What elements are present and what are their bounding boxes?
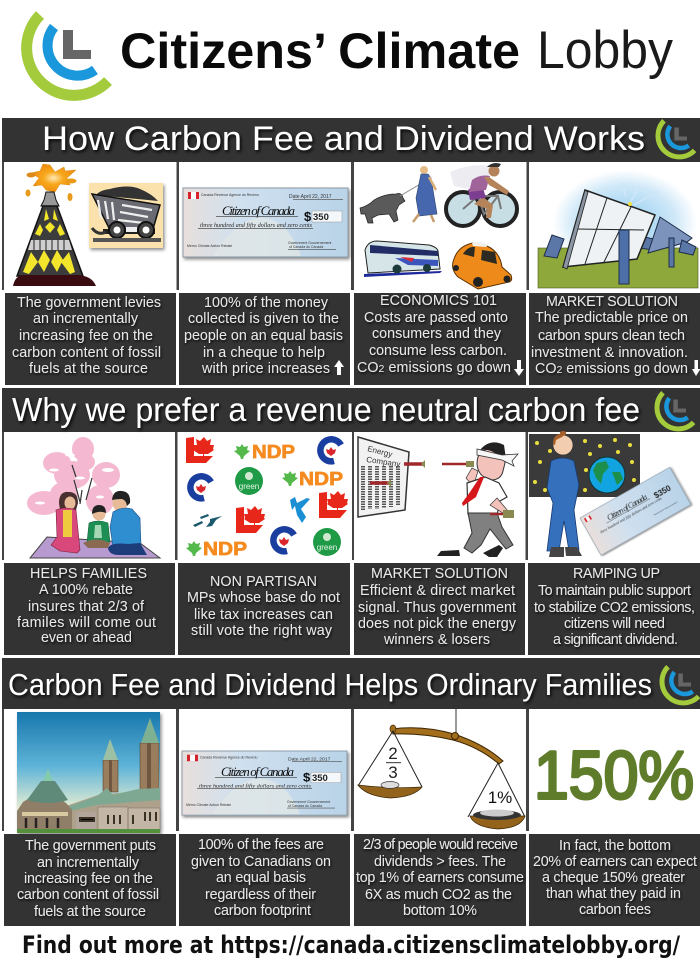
panel: non partisan: MPs whose base do not bbox=[187, 590, 340, 606]
panel: market solution bbox=[529, 293, 700, 385]
illustration: cheque: of Canada du Canada bbox=[289, 245, 323, 249]
illustration: cheque: Canada Revenue Agence du Revenu bbox=[200, 756, 258, 759]
icon: small logo bbox=[657, 393, 694, 429]
panel: bottom 20 percent: a cheque 150% greater bbox=[542, 870, 685, 886]
panel: non partisan bbox=[178, 563, 350, 655]
panel: economics 101: consumers and they bbox=[372, 326, 502, 342]
panel: helps families: HELPS FAMILIES bbox=[30, 566, 147, 582]
panel: non partisan: still vote the right way bbox=[191, 623, 333, 639]
heading band: Carbon Fee and Dividend Helps Ordinary Families bbox=[2, 658, 700, 709]
illustration: cheque: Date April 22, 2017 bbox=[288, 756, 331, 762]
panel: dividends greater than fees: dividends > fees. The bbox=[374, 854, 506, 870]
icon: tilted cheque: Government Gouvernement bbox=[653, 501, 678, 517]
panel: money returned: 100% of the money bbox=[204, 295, 329, 311]
icon: oil derrick bbox=[13, 164, 96, 286]
icon: back panels bbox=[544, 217, 696, 267]
logo: NDP bbox=[234, 442, 295, 462]
icon: logo mark bbox=[27, 15, 108, 95]
panel: market solution: investment & innovation. bbox=[531, 345, 688, 361]
panel: helps families: insures that 2/3 of bbox=[28, 599, 144, 615]
icon: tilted cheque bbox=[580, 467, 691, 555]
panel: economics 101: consume less carbon. bbox=[369, 343, 507, 359]
arrow: down bbox=[692, 360, 700, 376]
icon: right pan: 1% bbox=[488, 788, 512, 807]
logo: Citizens' Climate Lobby bbox=[27, 15, 673, 95]
illustration: political party logos bbox=[186, 437, 348, 559]
panel: market solution: winners & losers bbox=[383, 632, 490, 648]
icon: small logo bbox=[658, 121, 695, 157]
icon: front solar panel bbox=[563, 182, 658, 284]
panel: ramping up: RAMPING UP bbox=[573, 566, 660, 582]
icon: orange car bbox=[453, 242, 512, 289]
panel: government puts: fuels at the source bbox=[34, 904, 146, 920]
illustration: cheque: Government Gouvernement bbox=[287, 800, 330, 804]
icon: man with darts bbox=[437, 442, 518, 557]
panel: government levies bbox=[5, 293, 176, 385]
logo: NDP bbox=[282, 469, 343, 489]
panel: market solution: does not pick the energy bbox=[358, 616, 517, 632]
icon: maple leaf bbox=[244, 506, 265, 525]
panel: bottom 20 percent: 20% of earners can expect bbox=[533, 854, 697, 870]
icon: small logo bbox=[662, 667, 699, 703]
arrow: down bbox=[514, 360, 524, 376]
panel: bottom 20 percent bbox=[529, 834, 700, 926]
logo wordmark bold: Citizens’ Climate bbox=[120, 23, 520, 79]
heading text: Why we prefer a revenue neutral carbon fee bbox=[12, 391, 640, 428]
icon: Forces et Democratie logo bbox=[193, 514, 222, 527]
illustration: balance scale bbox=[358, 709, 525, 829]
logo: NDP: NDP bbox=[203, 539, 247, 559]
icon: globe bbox=[589, 457, 625, 493]
panel: bottom 20 percent: In fact, the bottom bbox=[559, 838, 671, 854]
logo: NDP bbox=[186, 539, 247, 559]
panel: government puts: The government puts bbox=[25, 838, 156, 854]
panel: government levies: carbon content of fossil bbox=[12, 345, 161, 361]
logo: Green party bbox=[313, 528, 341, 556]
panel: ramping up: to stabilize CO2 emissions, bbox=[534, 600, 695, 616]
icon: starry panel bbox=[529, 434, 640, 497]
panel: fees given: 100% of the fees are bbox=[198, 837, 324, 853]
icon: picnic rug bbox=[30, 537, 160, 558]
panel: market solution: MARKET SOLUTION bbox=[546, 294, 678, 310]
illustration: family under a blossom tree bbox=[27, 437, 160, 558]
panel: economics 101: Costs are passed onto bbox=[364, 310, 508, 326]
icon: mother bbox=[51, 492, 80, 553]
logo: Green party: green bbox=[239, 482, 259, 491]
panel: helps families: A 100% rebate bbox=[39, 582, 133, 598]
icon: energy company board bbox=[358, 437, 425, 517]
panel: non partisan: like tax increases can bbox=[194, 607, 333, 623]
icon: maple leaf bbox=[193, 437, 214, 456]
panel: economics 101 bbox=[354, 293, 526, 385]
panel: non partisan: NON PARTISAN bbox=[210, 574, 317, 590]
illustration: cheque: Government Gouvernement bbox=[288, 241, 331, 245]
panel: dividends greater than fees: top 1% of earners consume bbox=[356, 870, 524, 886]
icon: Liberal logo bbox=[319, 492, 347, 518]
illustration: woman, globe and cheque bbox=[529, 431, 691, 557]
panel: money returned: people on an equal basis bbox=[184, 328, 343, 344]
panel: money returned: collected is given to the bbox=[188, 311, 339, 327]
icon: right pan bbox=[468, 763, 525, 829]
illustration: cheque: Memo Climate Action Rebate bbox=[186, 803, 231, 807]
icon: towers bbox=[103, 718, 159, 808]
icon: cyclist bbox=[446, 163, 517, 226]
icon: Conservative logo bbox=[190, 476, 211, 498]
illustration: walking, cycling, bus and small car bbox=[360, 163, 517, 289]
panel: dividends greater than fees: 6X as much CO2 as the bbox=[365, 887, 512, 903]
icon: energy company board: Company bbox=[366, 455, 401, 469]
icon: left pan: 2 bbox=[388, 744, 398, 763]
heading text: How Carbon Fee and Dividend Works bbox=[42, 120, 645, 158]
panel: government levies: increasing fee on the bbox=[19, 328, 153, 344]
panel: fees given: regardless of their bbox=[205, 887, 316, 903]
illustration: cheque bbox=[182, 751, 347, 815]
illustration: blindfolded man throwing darts bbox=[358, 437, 518, 557]
panel: market solution: CO2 emissions go down bbox=[535, 361, 688, 377]
panel: helps families: even or ahead bbox=[41, 630, 132, 646]
illustration: cheque: three hundred and fifty dollars and zero cents bbox=[199, 782, 312, 789]
icon: dog walker bbox=[360, 166, 437, 223]
icon: bus bbox=[364, 241, 442, 277]
heading band: Why we prefer a revenue neutral carbon fee bbox=[2, 388, 700, 432]
icon: tilted cheque: three hundred and fifty dollars and zero cents bbox=[600, 496, 663, 535]
panel: government puts bbox=[4, 834, 176, 926]
icon: maple leaf bbox=[327, 491, 348, 510]
illustration: cheque: 350 bbox=[312, 773, 328, 783]
panel: market solution: The predictable price on bbox=[535, 310, 688, 326]
icon: scale beam bbox=[390, 709, 503, 764]
logo: Green party: green bbox=[317, 543, 337, 552]
panel: government puts: increasing fee on the bbox=[24, 871, 153, 887]
icon: library dome bbox=[17, 769, 160, 833]
heading band: How Carbon Fee and Dividend Works bbox=[2, 118, 700, 162]
logo: NDP: NDP bbox=[299, 469, 343, 489]
illustration: cheque: Citizen of Canada bbox=[222, 203, 296, 218]
icon: Liberal logo bbox=[236, 507, 263, 533]
panel: helps families bbox=[4, 563, 175, 655]
illustration: cheque: Citizen of Canada bbox=[221, 766, 294, 779]
panel: helps families: familes will come out bbox=[17, 615, 156, 631]
illustration: cheque bbox=[183, 188, 348, 257]
panel: fees given: an equal basis bbox=[216, 870, 306, 886]
illustration: Parliament buildings bbox=[17, 712, 160, 833]
panel: government puts: carbon content of fossil bbox=[17, 887, 159, 903]
panel: ramping up bbox=[528, 563, 700, 655]
illustration: cheque: of Canada du Canada bbox=[288, 804, 322, 808]
panel: bottom 20 percent: than what they paid in bbox=[546, 886, 681, 902]
heading text: Carbon Fee and Dividend Helps Ordinary Families bbox=[8, 667, 652, 702]
illustration: solar panels in a field bbox=[538, 170, 698, 288]
icon: Liberal logo bbox=[186, 437, 213, 463]
panel: ramping up: To maintain public support bbox=[538, 583, 691, 599]
illustration: cheque: three hundred and fifty dollars and zero cents bbox=[200, 222, 313, 229]
icon: centre block bbox=[66, 788, 160, 831]
panel: market solution: MARKET SOLUTION bbox=[371, 566, 508, 582]
panel: dividends greater than fees: 2/3 of people would receive bbox=[363, 837, 518, 853]
panel: government puts: an incrementally bbox=[37, 855, 140, 871]
logo wordmark light: Lobby bbox=[537, 21, 673, 80]
icon: coal cart bbox=[89, 183, 163, 248]
illustration: cheque: $ bbox=[303, 771, 310, 785]
icon: father bbox=[108, 491, 147, 555]
panel: economics 101: CO2 emissions go down bbox=[357, 360, 511, 376]
illustration: cheque: Date April 22, 2017 bbox=[289, 194, 332, 200]
panel: fees given: given to Canadians on bbox=[191, 854, 331, 870]
panel: money returned bbox=[179, 293, 350, 385]
icon: child bbox=[83, 505, 110, 548]
illustration: cheque: Memo Climate Action Rebate bbox=[187, 244, 232, 248]
panel: dividends greater than fees bbox=[354, 834, 526, 926]
icon: Bloc logo bbox=[290, 497, 310, 523]
panel: government levies: an incrementally bbox=[33, 311, 139, 327]
icon: Conservative logo bbox=[273, 529, 294, 551]
illustration: cheque: Canada Revenue Agence du Revenu bbox=[201, 193, 259, 197]
icon: blossom tree bbox=[27, 437, 120, 515]
panel: market solution: signal. Thus government bbox=[358, 600, 516, 616]
panel: ramping up: a significant dividend. bbox=[553, 632, 678, 648]
panel: fees given bbox=[179, 834, 350, 926]
icon: left pan: 3 bbox=[388, 763, 398, 782]
panel: government levies: fuels at the source bbox=[29, 361, 148, 377]
logo: NDP: NDP bbox=[252, 442, 295, 462]
illustration: oil derrick and coal cart bbox=[13, 164, 163, 286]
panel: bottom 20 percent: carbon fees bbox=[579, 902, 651, 918]
panel: fees given: carbon footprint bbox=[214, 903, 311, 919]
arrow: up bbox=[334, 360, 344, 375]
icon: Conservative logo bbox=[320, 439, 341, 461]
icon: woman in blue coveralls bbox=[547, 431, 582, 557]
panel: money returned: in a cheque to help bbox=[203, 345, 325, 361]
panel: dividends greater than fees: bottom 10% bbox=[403, 903, 477, 919]
panel: government levies: The government levies bbox=[17, 295, 161, 311]
icon: left pan bbox=[358, 731, 422, 798]
panel: money returned: with price increases bbox=[201, 361, 330, 377]
icon: tilted cheque: Citizen of Canada bbox=[605, 493, 649, 523]
panel: market solution bbox=[354, 563, 525, 655]
illustration: cheque: $ bbox=[304, 209, 312, 224]
panel: market solution: Efficient & direct market bbox=[360, 583, 515, 599]
panel: economics 101: ECONOMICS 101 bbox=[380, 293, 497, 309]
illustration: cheque: 350 bbox=[313, 212, 329, 223]
panel: ramping up: citizens will need bbox=[564, 616, 665, 632]
icon: tilted cheque: $350 bbox=[652, 483, 673, 500]
panel: market solution: carbon spurs clean tech bbox=[538, 328, 685, 344]
logo: Green party bbox=[235, 467, 263, 495]
icon: energy company board: Energy bbox=[367, 444, 393, 459]
